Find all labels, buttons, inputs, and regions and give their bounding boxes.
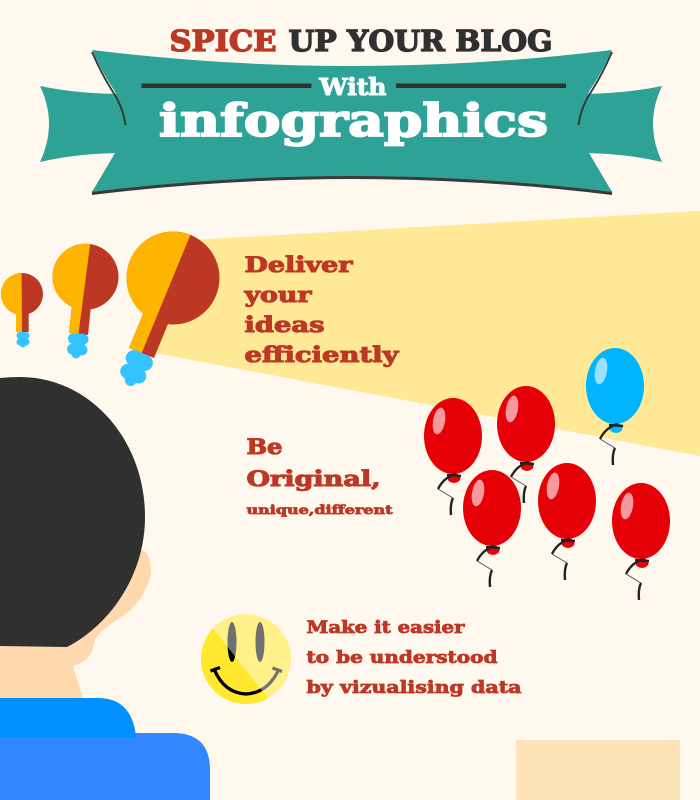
- lower torso: [0, 733, 210, 800]
- banner fold left: [92, 52, 126, 125]
- balloon: red 2: [497, 386, 555, 503]
- title: spice up your blog: UP YOUR BLOG: [288, 24, 552, 58]
- text: be original: unique,different: [246, 502, 393, 517]
- balloon: red 4: [538, 463, 596, 580]
- light beam: [150, 211, 700, 456]
- rule right: [396, 84, 566, 88]
- balloon: red 3: [463, 470, 521, 587]
- banner fold right: [578, 52, 612, 125]
- icon: large bulb: [118, 232, 220, 386]
- text: be original: Original,: [246, 466, 380, 491]
- text: make it easier: [306, 618, 522, 698]
- balloon: red 5: [612, 483, 670, 600]
- text: deliver your ideas efficiently: [243, 252, 400, 367]
- title: spice up your blog: SPICE: [170, 24, 276, 58]
- text: be original: [246, 434, 393, 517]
- skin: neck and ear: [0, 548, 151, 698]
- text: make it easier: by vizualising data: [306, 678, 522, 698]
- text: deliver your ideas efficiently: Deliver: [244, 252, 354, 277]
- title: spice up your blog: [170, 24, 552, 58]
- text: make it easier: Make it easier: [306, 618, 466, 638]
- balloon: blue: [586, 348, 644, 465]
- banner left tail: [40, 86, 125, 162]
- icon: small bulb: [1, 273, 43, 348]
- text: deliver your ideas efficiently: efficiently: [244, 342, 400, 367]
- text: make it easier: to be understood: [306, 648, 498, 668]
- balloon: red 1: [424, 398, 482, 515]
- text: deliver your ideas efficiently: your: [243, 282, 313, 307]
- with: With: [318, 74, 387, 101]
- icon: medium bulb: [52, 244, 118, 358]
- person: [0, 377, 210, 800]
- banner: [40, 50, 662, 195]
- text: deliver your ideas efficiently: ideas: [244, 312, 324, 337]
- upper shirt: [0, 698, 136, 737]
- banner body: [92, 50, 612, 192]
- banner bottom shadow: [92, 173, 612, 195]
- bottom right box: [516, 740, 680, 800]
- infographics: infographics: [159, 94, 548, 147]
- hair: [0, 377, 145, 647]
- icon: smiley: [201, 614, 291, 704]
- banner right tail: [578, 86, 662, 162]
- text: be original: Be: [246, 434, 282, 459]
- rule left: [142, 84, 312, 88]
